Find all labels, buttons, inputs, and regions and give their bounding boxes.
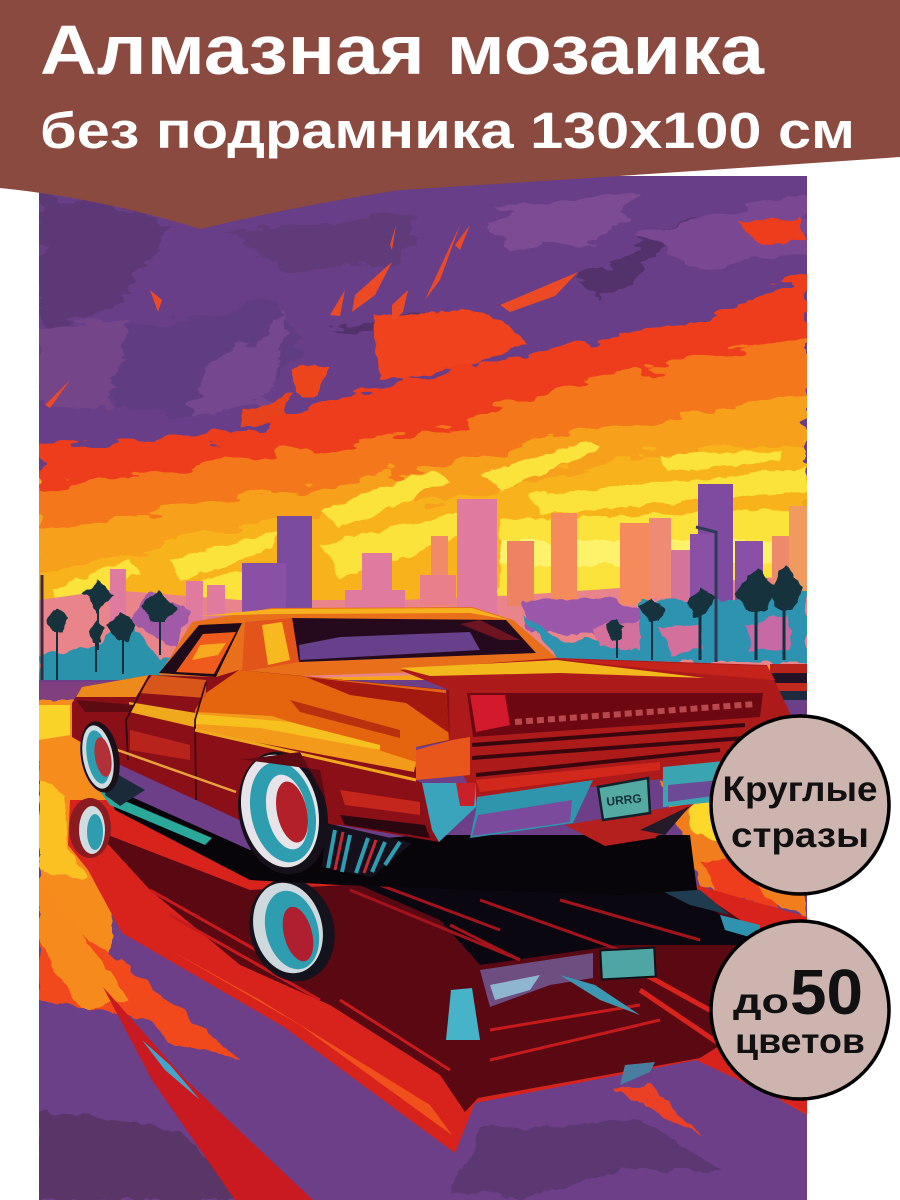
reflected front wheel — [69, 798, 111, 858]
badge: up to 50 colours: 50 — [790, 956, 863, 1028]
subtitle: без подрамника 130х100 см — [40, 102, 855, 159]
rear window — [292, 618, 536, 662]
palm trees — [42, 527, 802, 682]
far wheel — [565, 803, 695, 846]
rear wheel — [238, 752, 412, 877]
front wheel — [80, 721, 145, 806]
licence plate — [598, 778, 650, 820]
header banner — [0, 0, 900, 229]
badge: round rhinestones: стразы — [731, 816, 869, 855]
side window — [159, 623, 242, 677]
car reflection — [68, 798, 807, 1153]
body side — [72, 670, 452, 842]
badge: up to 50 colours: до — [733, 982, 789, 1021]
sky — [39, 176, 807, 696]
badge: round rhinestones — [711, 716, 889, 894]
teal tree line and road edge — [39, 590, 807, 680]
painting: car at sunset — [39, 176, 807, 1200]
badge: up to 50 colours: цветов — [735, 1022, 865, 1061]
city skyline — [39, 484, 807, 685]
C-pillar — [242, 618, 299, 672]
flank highlights — [76, 670, 449, 838]
roof and cabin — [159, 607, 557, 678]
reflected rear wheel — [249, 881, 335, 982]
car — [72, 607, 790, 883]
badge: round rhinestones: Круглые — [722, 770, 878, 809]
trunk and rear — [400, 658, 790, 800]
licence plate: URRG — [606, 791, 642, 809]
rear bumper — [422, 783, 476, 842]
car shadow — [99, 785, 697, 895]
badge: up to 50 colours — [711, 921, 889, 1099]
title: Алмазная мозаика — [40, 11, 765, 89]
wet road — [39, 664, 807, 1200]
